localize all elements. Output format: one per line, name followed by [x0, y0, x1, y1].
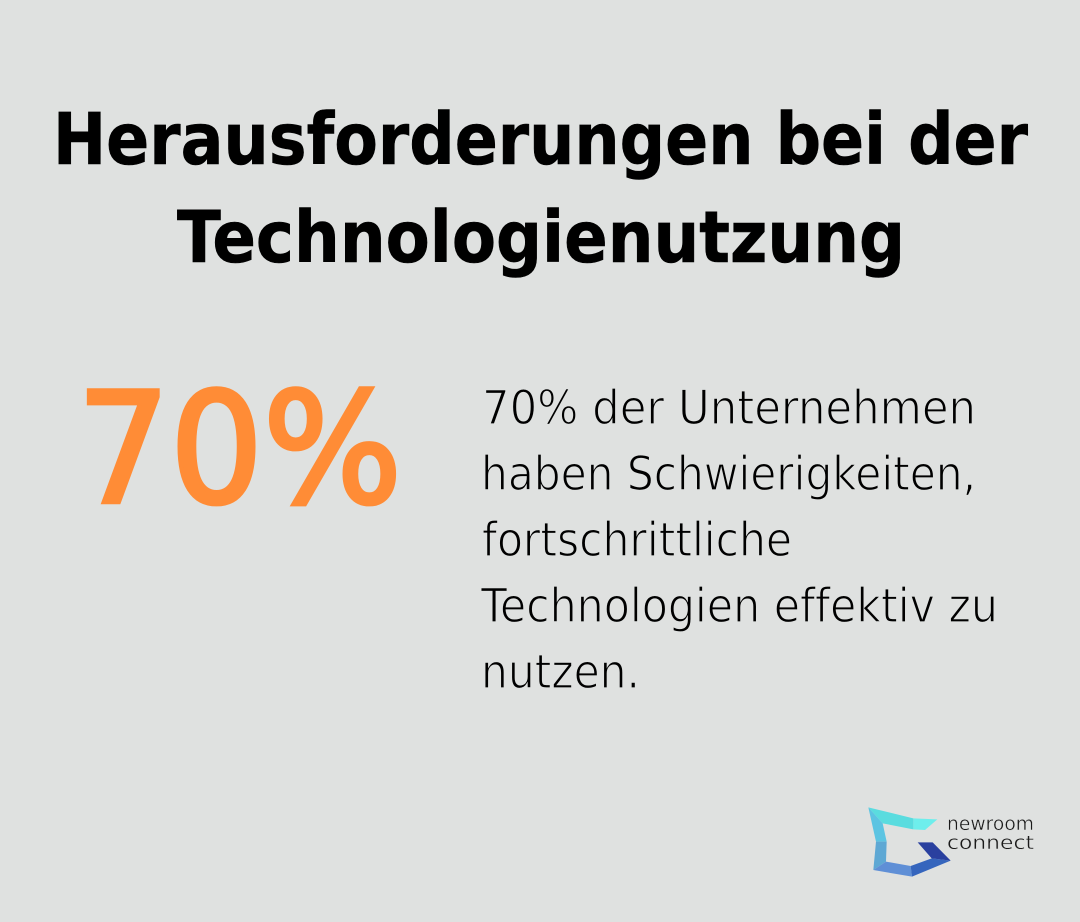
- description text: haben Schwierigkeiten,: [481, 447, 976, 502]
- big statistic: 70%: 70%: [77, 361, 402, 539]
- description text: [480, 381, 998, 700]
- description text: nutzen.: [481, 645, 640, 700]
- logo wordmark: connect: [947, 833, 1034, 854]
- title: [53, 98, 1028, 279]
- icon: logo mark: [868, 807, 951, 877]
- title: Technologienutzung: [177, 196, 905, 279]
- logo wordmark: [947, 814, 1034, 854]
- description text: fortschrittliche: [482, 513, 792, 568]
- logo wordmark: newroom: [947, 814, 1034, 835]
- description text: 70% der Unternehmen: [482, 381, 976, 436]
- description text: Technologien effektiv zu: [480, 579, 998, 634]
- logo: newroom connect: [868, 807, 1034, 877]
